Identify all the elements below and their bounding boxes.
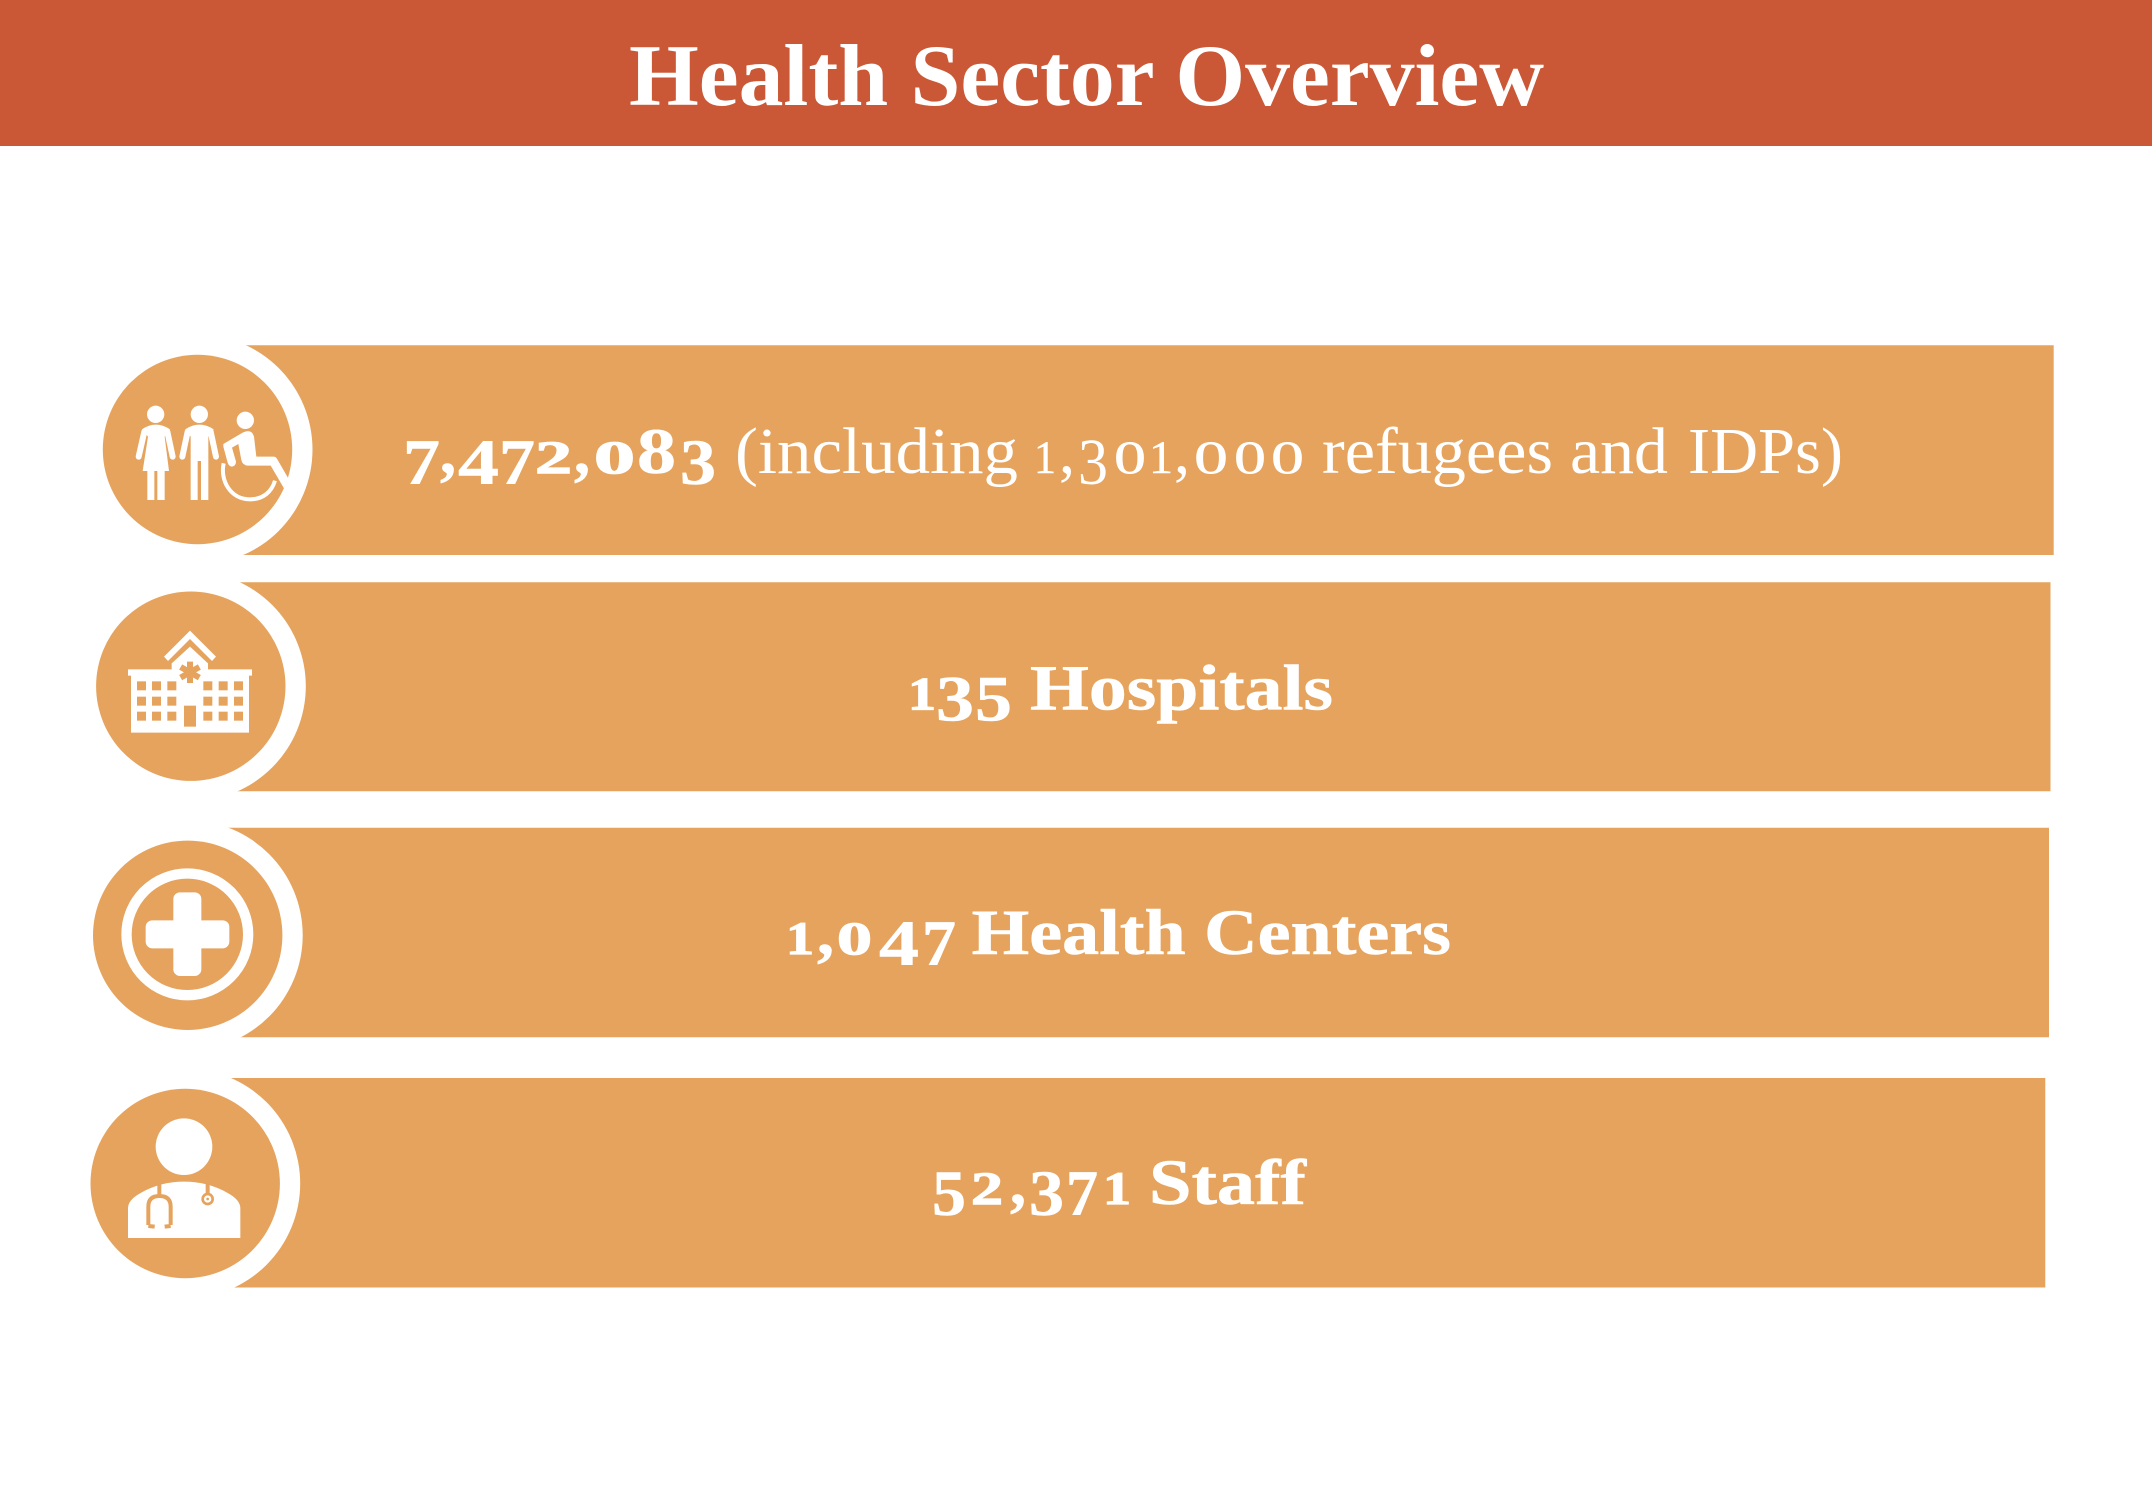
- health centers figure: 0: [837, 913, 872, 965]
- health centers figure: [786, 897, 1451, 980]
- health centers figure: ,: [817, 897, 834, 969]
- population figure: 0: [1234, 432, 1266, 484]
- population figure: 7: [499, 427, 535, 499]
- population figure: 1: [1149, 432, 1173, 484]
- population figure: 0: [1271, 432, 1304, 484]
- panel: health centers: [73, 820, 2049, 1050]
- population figure: ,: [1059, 415, 1075, 488]
- hospitals figure: 1: [908, 668, 936, 720]
- health centers figure: 4: [879, 908, 919, 980]
- population figure: ,: [440, 416, 456, 488]
- title: Health Sector Overview: [629, 28, 1544, 125]
- population figure: (including: [735, 415, 1018, 488]
- staff figure: Staff: [1149, 1147, 1308, 1219]
- population figure: 8: [637, 416, 676, 488]
- population figure: IDPs): [1688, 415, 1843, 488]
- icon: doctor with stethoscope: [128, 1118, 240, 1238]
- header banner: [0, 0, 2152, 146]
- population figure: 4: [458, 427, 499, 499]
- hospitals figure: 5: [975, 663, 1012, 735]
- staff figure: 3: [1029, 1158, 1064, 1230]
- staff figure: 1: [1103, 1163, 1131, 1215]
- staff figure: 7: [1066, 1158, 1098, 1230]
- population figure: ,: [1174, 415, 1190, 488]
- population figure: 2: [535, 432, 572, 484]
- population figure: 0: [594, 432, 635, 484]
- health centers figure: 1: [786, 913, 814, 965]
- population figure: 7: [403, 427, 440, 499]
- icon: hospital building: [128, 631, 252, 733]
- hospitals figure: [908, 652, 1333, 735]
- population figure: 3: [680, 427, 716, 499]
- staff figure: 5: [932, 1158, 966, 1230]
- health centers figure: Health Centers: [972, 897, 1451, 969]
- staff figure: [932, 1147, 1308, 1230]
- population figure: ,: [574, 416, 590, 488]
- staff figure: ,: [1010, 1147, 1026, 1219]
- hospitals figure: 3: [936, 663, 974, 735]
- health centers figure: 7: [922, 908, 956, 980]
- population figure: 1: [1034, 432, 1056, 484]
- population figure: and: [1570, 415, 1668, 488]
- population figure: [403, 415, 1843, 499]
- panel: hospitals: [76, 571, 2050, 801]
- population figure: 0: [1114, 432, 1146, 484]
- population figure: 0: [1194, 432, 1228, 484]
- icon: people and wheelchair user: [139, 406, 288, 500]
- population figure: refugees: [1322, 415, 1553, 488]
- staff figure: 2: [971, 1163, 1003, 1215]
- panel: population: [82, 334, 2054, 564]
- icon: medical cross in ring: [126, 873, 248, 995]
- panel: staff: [70, 1068, 2045, 1298]
- hospitals figure: Hospitals: [1030, 652, 1333, 724]
- population figure: 3: [1078, 426, 1108, 499]
